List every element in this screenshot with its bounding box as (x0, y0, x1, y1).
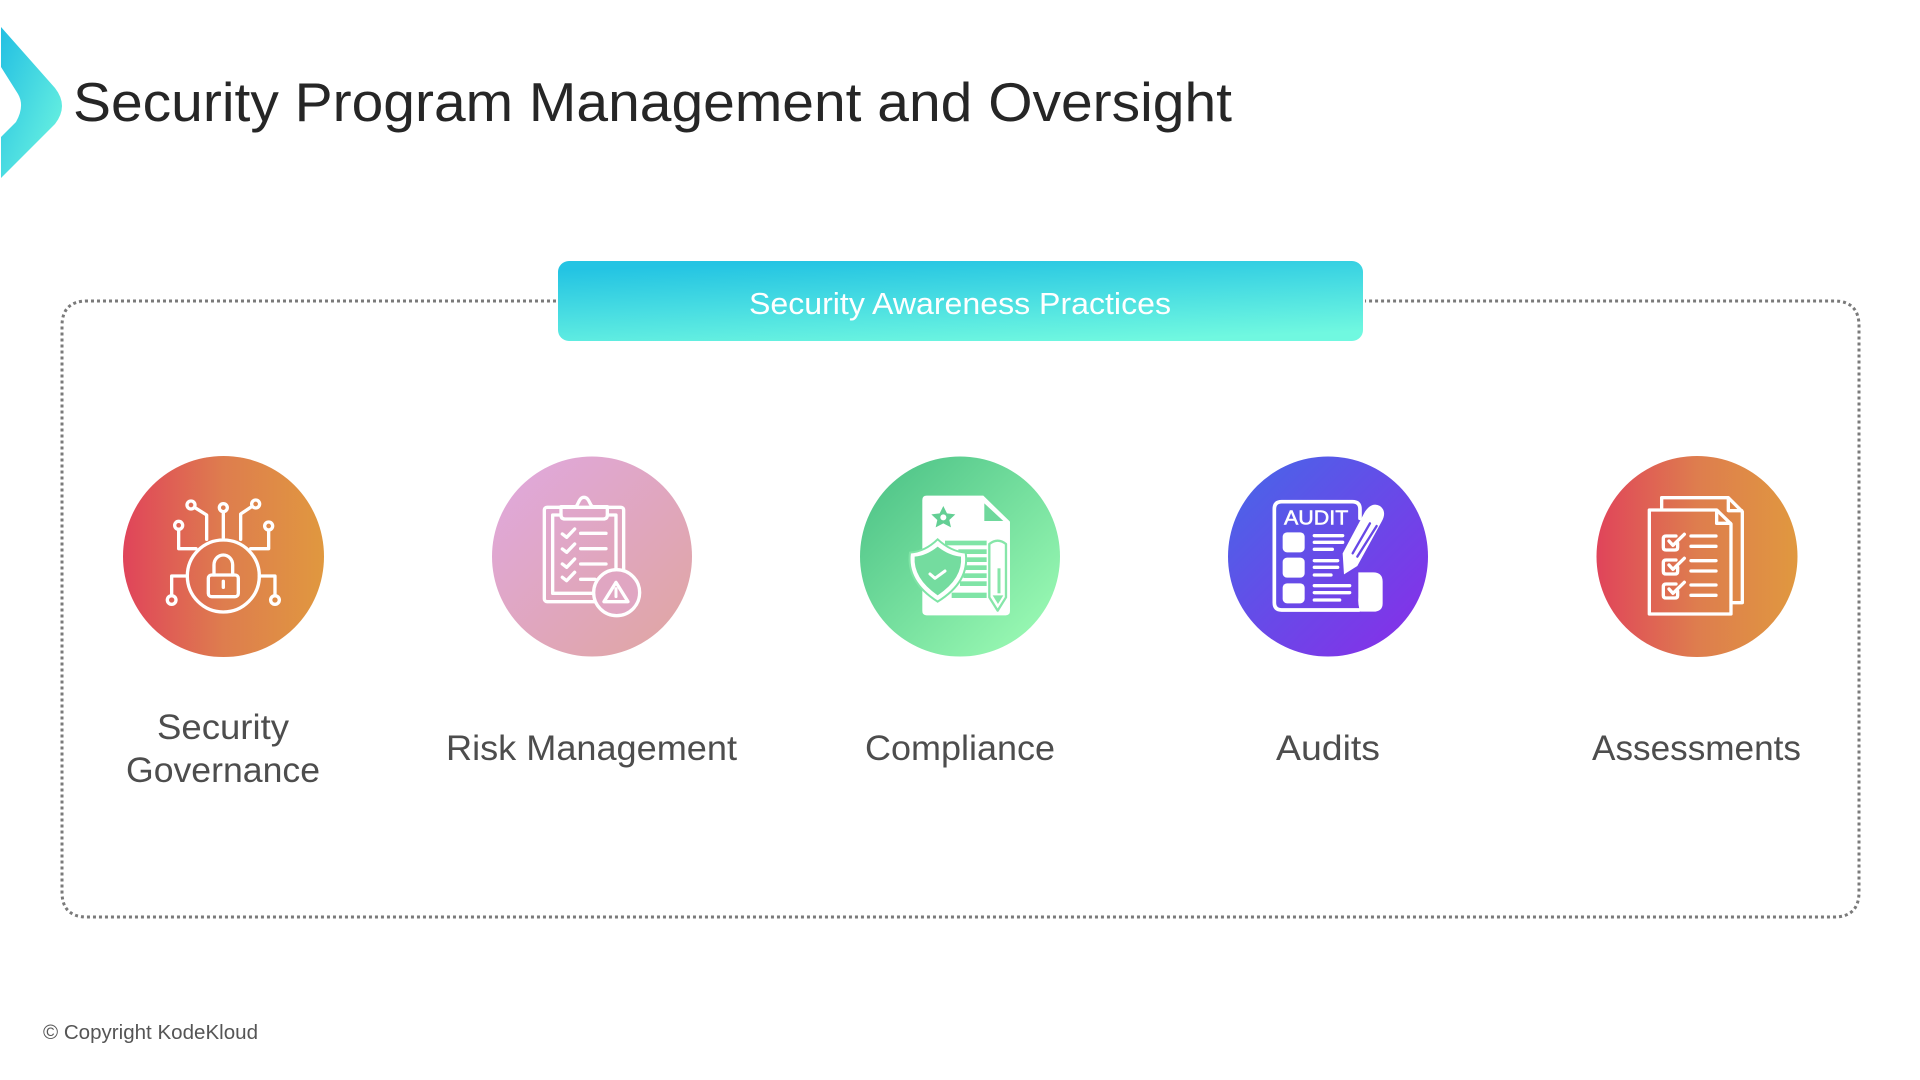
dotted frame panel (62, 301, 1859, 917)
circle: compliance (860, 456, 1060, 656)
banner: Security Awareness Practices: Security Awareness Practices (749, 286, 1171, 321)
label: Security Governance: Governance (126, 751, 320, 790)
chevron logo (1, 27, 62, 178)
circle: assessments (1596, 456, 1798, 657)
icon: clipboard warning (544, 497, 640, 616)
circle: risk management (492, 456, 692, 656)
label: Security Governance (126, 708, 320, 790)
label: Security Governance: Security (157, 708, 290, 747)
banner: Security Awareness Practices (558, 261, 1363, 341)
icon: audit checklist with pencil: AUDIT (1284, 507, 1348, 529)
item: Risk Management (446, 456, 737, 768)
copyright footer: © Copyright KodeKloud (43, 1022, 258, 1044)
icon: compliance document with shield (910, 496, 1010, 615)
icon: circuit lock (167, 500, 279, 612)
icon: audit checklist with pencil (1274, 502, 1384, 612)
icon: assessment documents (1649, 498, 1742, 614)
circle: security governance (123, 456, 324, 657)
label: Compliance: Compliance (865, 729, 1055, 768)
label: Audits: Audits (1276, 729, 1380, 768)
label: Risk Management: Risk Management (446, 729, 737, 768)
item: Compliance (860, 456, 1060, 768)
title: Security Program Management and Oversight (73, 71, 1232, 133)
item: Assessments (1592, 456, 1801, 768)
label: Assessments: Assessments (1592, 729, 1801, 768)
item: Security Governance (123, 456, 324, 790)
circle: audits (1228, 456, 1428, 656)
item: Audits (1228, 456, 1428, 768)
